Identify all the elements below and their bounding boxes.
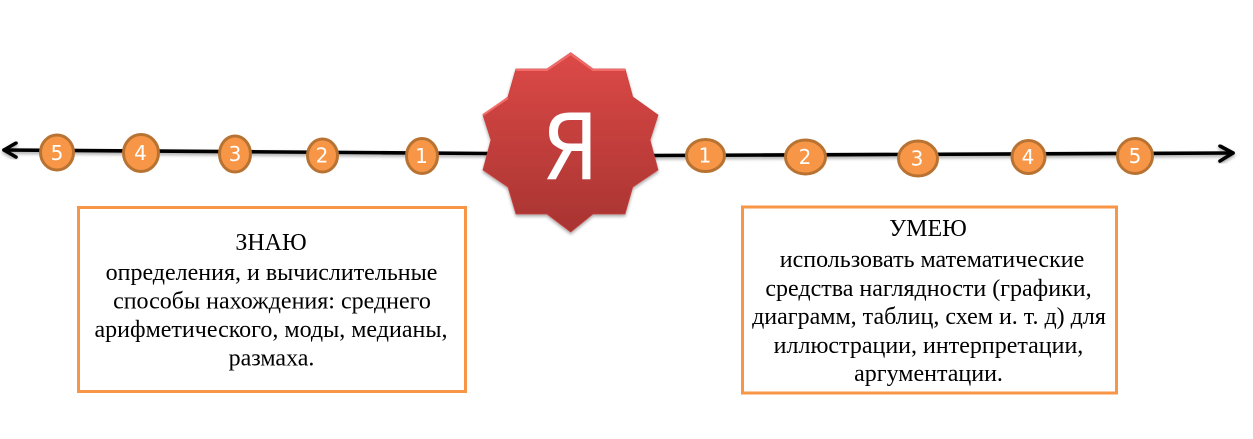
skills text: диаграмм, таблиц, схем и. т. д) для	[752, 304, 1106, 330]
marker 3 left	[220, 136, 250, 172]
skills text: использовать математические	[780, 247, 1084, 273]
skills text: иллюстрации, интерпретации,	[774, 333, 1083, 359]
right axis arrow	[652, 146, 1233, 161]
star top bevel highlight	[483, 54, 625, 115]
star shape	[483, 53, 658, 232]
marker 1 left: 1	[415, 144, 428, 168]
knowledge text: определения, и вычислительные	[106, 260, 437, 286]
marker 2 right	[786, 140, 826, 174]
marker 5 left	[40, 135, 74, 170]
marker 2 left	[308, 139, 338, 172]
marker 3 right	[898, 141, 938, 176]
marker 3 left: 3	[229, 142, 241, 166]
marker 5 right	[1118, 138, 1152, 174]
marker 5 left: 5	[51, 141, 63, 165]
left scale markers 5 to 1	[40, 134, 438, 174]
right scale markers 1 to 5	[686, 138, 1152, 176]
marker 4 left: 4	[134, 141, 147, 165]
left axis arrow	[4, 143, 490, 157]
panel: knowledge box	[78, 208, 466, 392]
marker 2 right: 2	[799, 145, 811, 169]
knowledge text: размаха.	[229, 346, 314, 372]
skills text: УМЕЮ	[889, 216, 967, 242]
marker 4 right: 4	[1022, 145, 1034, 169]
marker 1 right	[686, 140, 724, 172]
central red star badge	[483, 53, 658, 232]
skills text: средства наглядности (графики,	[765, 276, 1092, 302]
letter Я: Я	[542, 94, 598, 202]
marker 4 right	[1012, 140, 1045, 174]
marker 4 left	[124, 134, 158, 172]
knowledge text: арифметического, моды, медианы,	[95, 317, 447, 343]
marker 1 left	[406, 138, 438, 174]
marker 2 left: 2	[316, 144, 328, 168]
panel: skills box	[742, 207, 1116, 393]
knowledge text: ЗНАЮ	[235, 230, 307, 256]
marker 3 right: 3	[911, 146, 923, 170]
marker 5 right: 5	[1129, 144, 1141, 168]
knowledge text: способы нахождения: среднего	[113, 288, 431, 314]
marker 1 right: 1	[699, 144, 711, 168]
skills text: аргументации.	[854, 361, 1003, 387]
